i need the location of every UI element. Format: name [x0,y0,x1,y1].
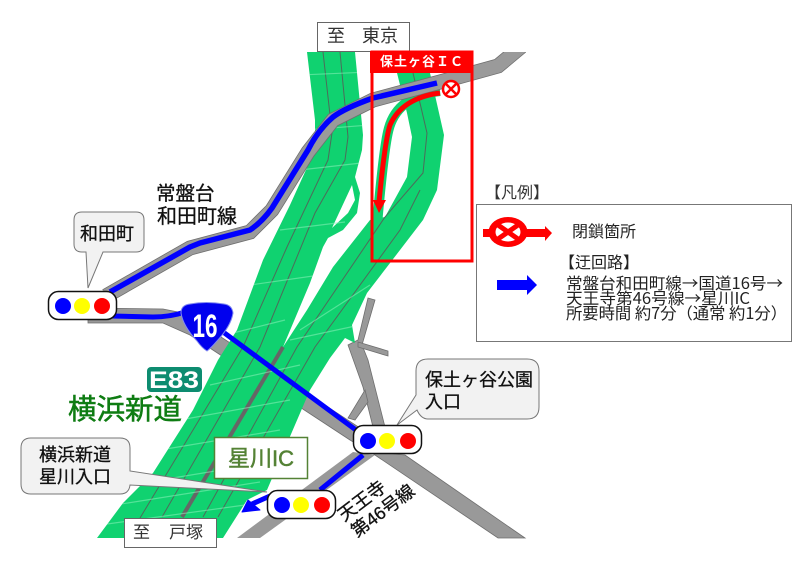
legend text: closed section: 閉鎖箇所 [572,223,636,241]
traffic signal: Wadamachi [48,292,116,320]
label: Tennoji route 46: 第46号線 [347,481,419,541]
callout: Yokohama Shindo Hoshikawa entrance: 星川入口 [39,467,111,487]
local roads: lower gray network [88,298,525,538]
callout: Wadamachi [74,212,144,288]
destination label: Totsuka: 至 [133,523,150,542]
legend text: detour description [559,249,787,324]
callout: Wadamachi: 和田町 [80,224,134,244]
callout: Yokohama Shindo Hoshikawa entrance: 横浜新道 [39,445,111,465]
Joban-dai Wadamachi line: gray road [106,46,522,296]
route badge: E83: E83 [149,367,199,394]
destination label: Tokyo: 東京 [362,26,398,46]
callout: Hodogaya Park entrance [397,359,539,425]
expressway: Yokohama Shindo green bands [97,52,444,538]
icon: blue detour arrow [497,275,537,295]
label: Hoshikawa IC [214,438,308,478]
destination label: Tokyo: 至 [327,26,345,46]
legend text: detour description: 所要時間 約7分（通常 約1分） [566,300,787,324]
label: Joban-dai Wadamachi line [156,183,237,228]
legend text: detour description: 天王寺第46号線→星川IC [566,285,750,309]
legend heading: 【凡例】 [485,184,549,202]
route 16 shield [181,302,233,351]
detour route: blue line [110,83,437,512]
label: Yokohama Shindo: 横浜新道 [68,394,182,426]
inner gap of the side ramp [332,185,355,228]
destination label: Totsuka [124,518,216,548]
traffic signal: Hoshikawa entrance [268,490,336,518]
legend text: detour description: 常盤台和田町線→国道16号→ [566,270,783,294]
label: Joban-dai Wadamachi line: 和田町線 [157,205,237,228]
callout: Hodogaya Park entrance: 入口 [425,392,461,412]
destination label: Totsuka: 戸塚 [169,523,203,542]
icon: closure symbol with red arrow [483,217,552,247]
traffic signal: Hodogaya Park entrance [354,426,422,454]
ramp at Hodogaya IC [377,91,440,225]
label: Joban-dai Wadamachi line: 常盤台 [156,183,215,205]
label: Tennoji route 46: 天王寺 [334,477,390,525]
panel: legend [476,204,792,342]
callout: Yokohama Shindo Hoshikawa entrance [21,438,267,494]
legend text: detour description: 【迂回路】 [559,249,639,273]
Hodogaya IC closure box: 保土ヶ谷ＩＣ [380,54,463,69]
Hodogaya IC closure box [370,51,473,261]
route 16 shield: 16 [192,308,218,344]
closed route red arrow [373,93,440,213]
destination label: Tokyo [318,22,410,52]
icon: closure marker [443,81,459,97]
label: Hoshikawa IC: 星川IC [228,446,294,471]
callout: Hodogaya Park entrance: 保土ヶ谷公園 [425,370,533,390]
